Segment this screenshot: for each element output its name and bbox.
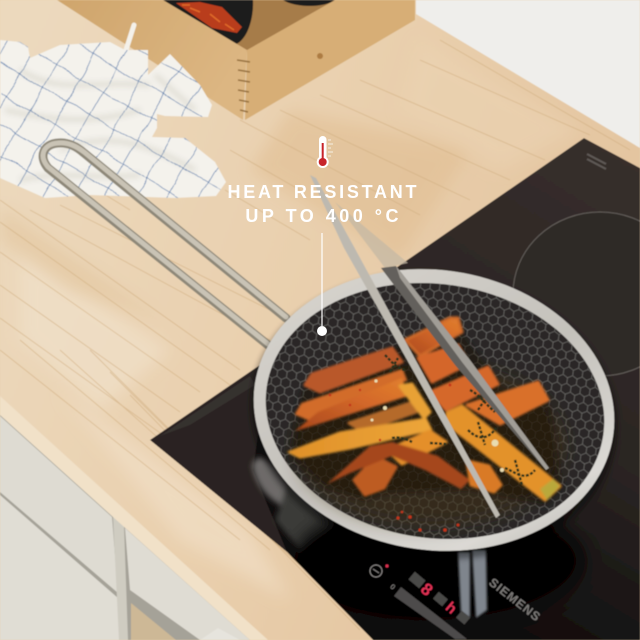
slider control: 0 [388, 584, 396, 591]
heading: heat resistant: HEAT RESISTANT [227, 182, 419, 202]
pan interior [249, 262, 621, 560]
tong blade: front [310, 175, 500, 518]
induction hob [150, 138, 640, 640]
tea towel [0, 25, 240, 205]
wall [416, 0, 640, 148]
red display digits [420, 582, 456, 615]
box interior [160, 0, 340, 52]
frying pan [232, 175, 636, 582]
chili flakes and garlic [329, 379, 504, 532]
red display digits: 8 [417, 579, 436, 600]
second bowl [283, 0, 335, 6]
cooking oil [295, 363, 565, 527]
pan rim [235, 246, 633, 574]
power button [370, 564, 389, 577]
herbs [385, 355, 535, 485]
honeycomb texture [249, 262, 621, 560]
pan base reflection [295, 500, 585, 620]
pan shadow [232, 250, 636, 582]
box left face [57, 0, 247, 120]
reflection stripes [458, 550, 487, 618]
box right face [245, 0, 415, 120]
icon: thermometer [317, 136, 333, 168]
grey display icons [408, 572, 470, 625]
subheading: up to 400 °C: UP TO 400 °C [245, 206, 402, 226]
pan handle [43, 143, 286, 345]
brand: SIEMENS: SIEMENS [486, 575, 544, 624]
cabinets [0, 396, 268, 640]
callout leader line with dot [317, 233, 327, 336]
bowl of chili flakes [163, 0, 253, 45]
slider control [388, 584, 467, 639]
burner ring [513, 212, 640, 376]
carrots [288, 318, 560, 500]
tong blade: rear [335, 202, 549, 470]
brand mark on hob [587, 154, 606, 169]
carrot shadows [290, 320, 562, 505]
red display digits: h [442, 599, 460, 618]
wooden box [57, 0, 415, 120]
counter front edge [0, 396, 268, 640]
